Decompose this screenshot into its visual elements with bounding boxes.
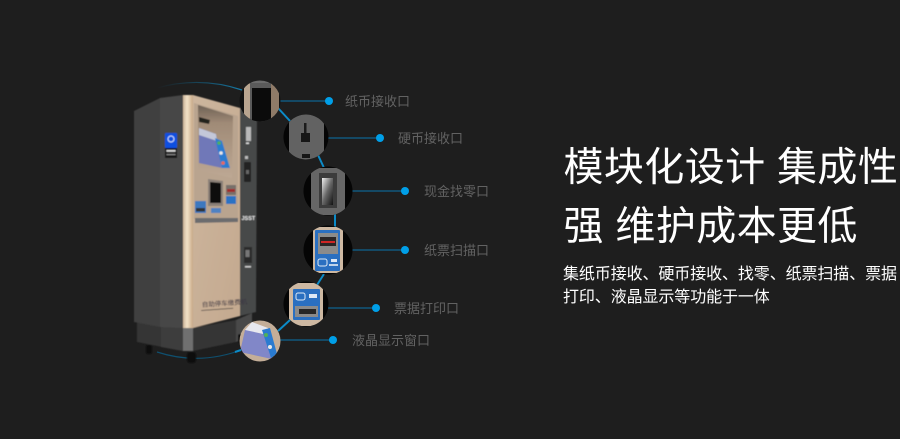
right dark side (240, 108, 257, 316)
dot 2 (376, 134, 384, 142)
decorative arc: top (157, 82, 242, 90)
leader line 6 (280, 339, 333, 341)
dot 6 (329, 336, 337, 344)
dot 1 (325, 97, 333, 105)
dot 4 (401, 246, 409, 254)
icon: change return close-up (303, 166, 353, 216)
description (563, 265, 897, 306)
description: 集纸币接收、硬币接收、找零、纸票扫描、票据 (563, 265, 897, 283)
decorative arc: bottom (157, 349, 244, 358)
leader line 3 (352, 190, 405, 192)
front left panel (160, 95, 183, 328)
label: 纸币接收口: 纸币接收口 (345, 94, 410, 109)
bill scanner module (226, 185, 236, 204)
screen recess (194, 103, 238, 219)
label: 现金找零口: 现金找零口 (424, 184, 489, 199)
lower display (208, 179, 223, 206)
icon: bill acceptor close-up (239, 80, 281, 122)
machine base (137, 313, 252, 351)
leader line 4 (352, 249, 405, 251)
kiosk machine (134, 95, 257, 363)
title (564, 146, 898, 248)
side slots (244, 127, 252, 268)
leader line 2 (328, 137, 380, 139)
blue printer module (195, 201, 221, 213)
app badge (165, 133, 177, 158)
description: 打印、液晶显示等功能于一体 (563, 288, 770, 306)
title: 强 维护成本更低 (564, 204, 858, 248)
panel logo: 自助停车缴费机 (201, 297, 248, 309)
label: 硬币接收口: 硬币接收口 (398, 131, 463, 146)
connector lines between circles (235, 108, 335, 352)
casters (146, 334, 245, 363)
left side panel (134, 98, 160, 327)
icon: ticket scanner close-up (303, 225, 353, 275)
icon: ticket printer close-up (283, 281, 329, 327)
label: 液晶显示窗口: 液晶显示窗口 (352, 333, 430, 348)
touch screen (199, 128, 230, 168)
title: 模块化设计 集成性 (564, 146, 898, 190)
icon: coin acceptor close-up (283, 114, 329, 160)
leader line 1 (280, 100, 329, 102)
dot 3 (401, 187, 409, 195)
brand label: JSST (242, 216, 256, 222)
icon: LCD window close-up (239, 320, 281, 362)
dot 5 (372, 304, 380, 312)
panel logo (200, 297, 248, 311)
label: 纸票扫描口: 纸票扫描口 (424, 243, 489, 258)
gold edge strip (183, 95, 193, 328)
label: 票据打印口: 票据打印口 (394, 301, 459, 316)
leader line 5 (328, 307, 376, 309)
grey bottom bar (195, 218, 238, 223)
gold front panel (193, 95, 240, 328)
